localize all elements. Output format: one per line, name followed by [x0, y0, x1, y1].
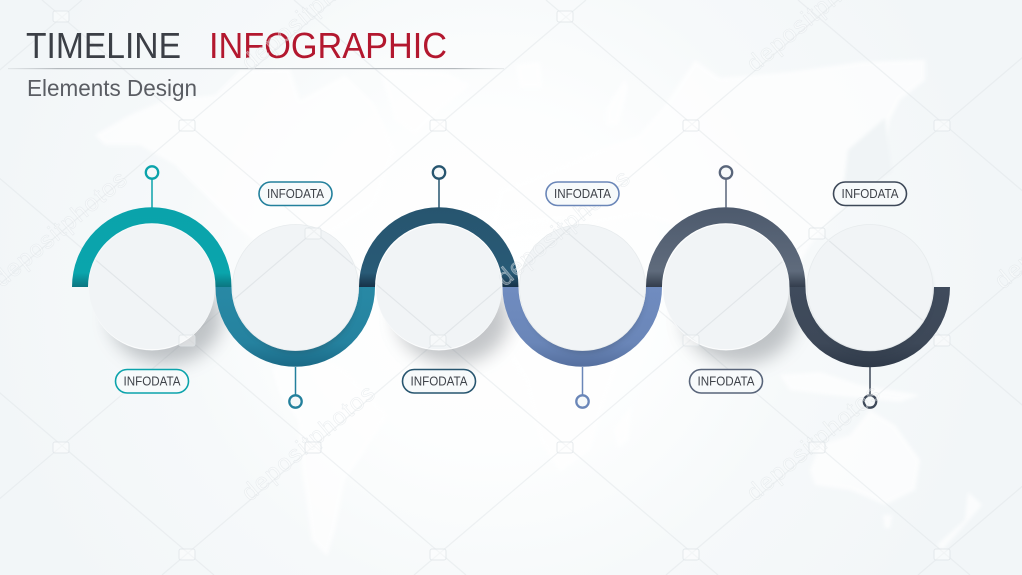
pin 1 [146, 166, 158, 208]
label 6 [834, 182, 906, 206]
circle 5 [663, 224, 789, 350]
label 3 [402, 370, 476, 393]
step 2 arc [224, 287, 367, 359]
step 6 arc [798, 287, 942, 359]
circle shadows [110, 272, 796, 364]
watermark lines over circles [96, 226, 923, 348]
title: TIMELINE [26, 25, 181, 66]
label 4: INFODATA [554, 187, 612, 201]
pin 4 [576, 367, 589, 408]
title: INFOGRAPHIC [209, 25, 447, 66]
world map [95, 60, 982, 556]
label 3: INFODATA [410, 374, 468, 388]
circle 1 [89, 224, 215, 350]
step 1 arc [80, 215, 224, 287]
step 4 arc [510, 287, 654, 359]
circle 6 [807, 224, 933, 350]
title rule [8, 68, 504, 69]
pin 5 [720, 166, 732, 208]
label 2 [259, 182, 332, 206]
pin 3 [433, 166, 445, 208]
watermark: text: depositphotos [492, 165, 635, 292]
label 6: INFODATA [842, 187, 899, 201]
step 3 arc [367, 215, 510, 287]
bottom circle soft shadows [237, 233, 931, 353]
step 5 arc [654, 215, 798, 287]
label 4 [546, 182, 619, 206]
circle 3 [376, 224, 502, 350]
pin 2 [289, 367, 302, 408]
map sea patch [842, 118, 892, 200]
watermark: text: depositphotos [237, 380, 380, 507]
circle 4 [520, 224, 646, 350]
pin 6 [864, 367, 876, 408]
label 1 [116, 370, 188, 393]
label 5 [690, 370, 762, 393]
label 1: INFODATA [124, 374, 181, 388]
label 5: INFODATA [698, 374, 755, 388]
label 2: INFODATA [267, 187, 325, 201]
circle 2 [232, 224, 358, 350]
watermark: text: depositphotos [742, 380, 885, 507]
title [26, 25, 447, 66]
subtitle: Elements Design [27, 75, 197, 101]
